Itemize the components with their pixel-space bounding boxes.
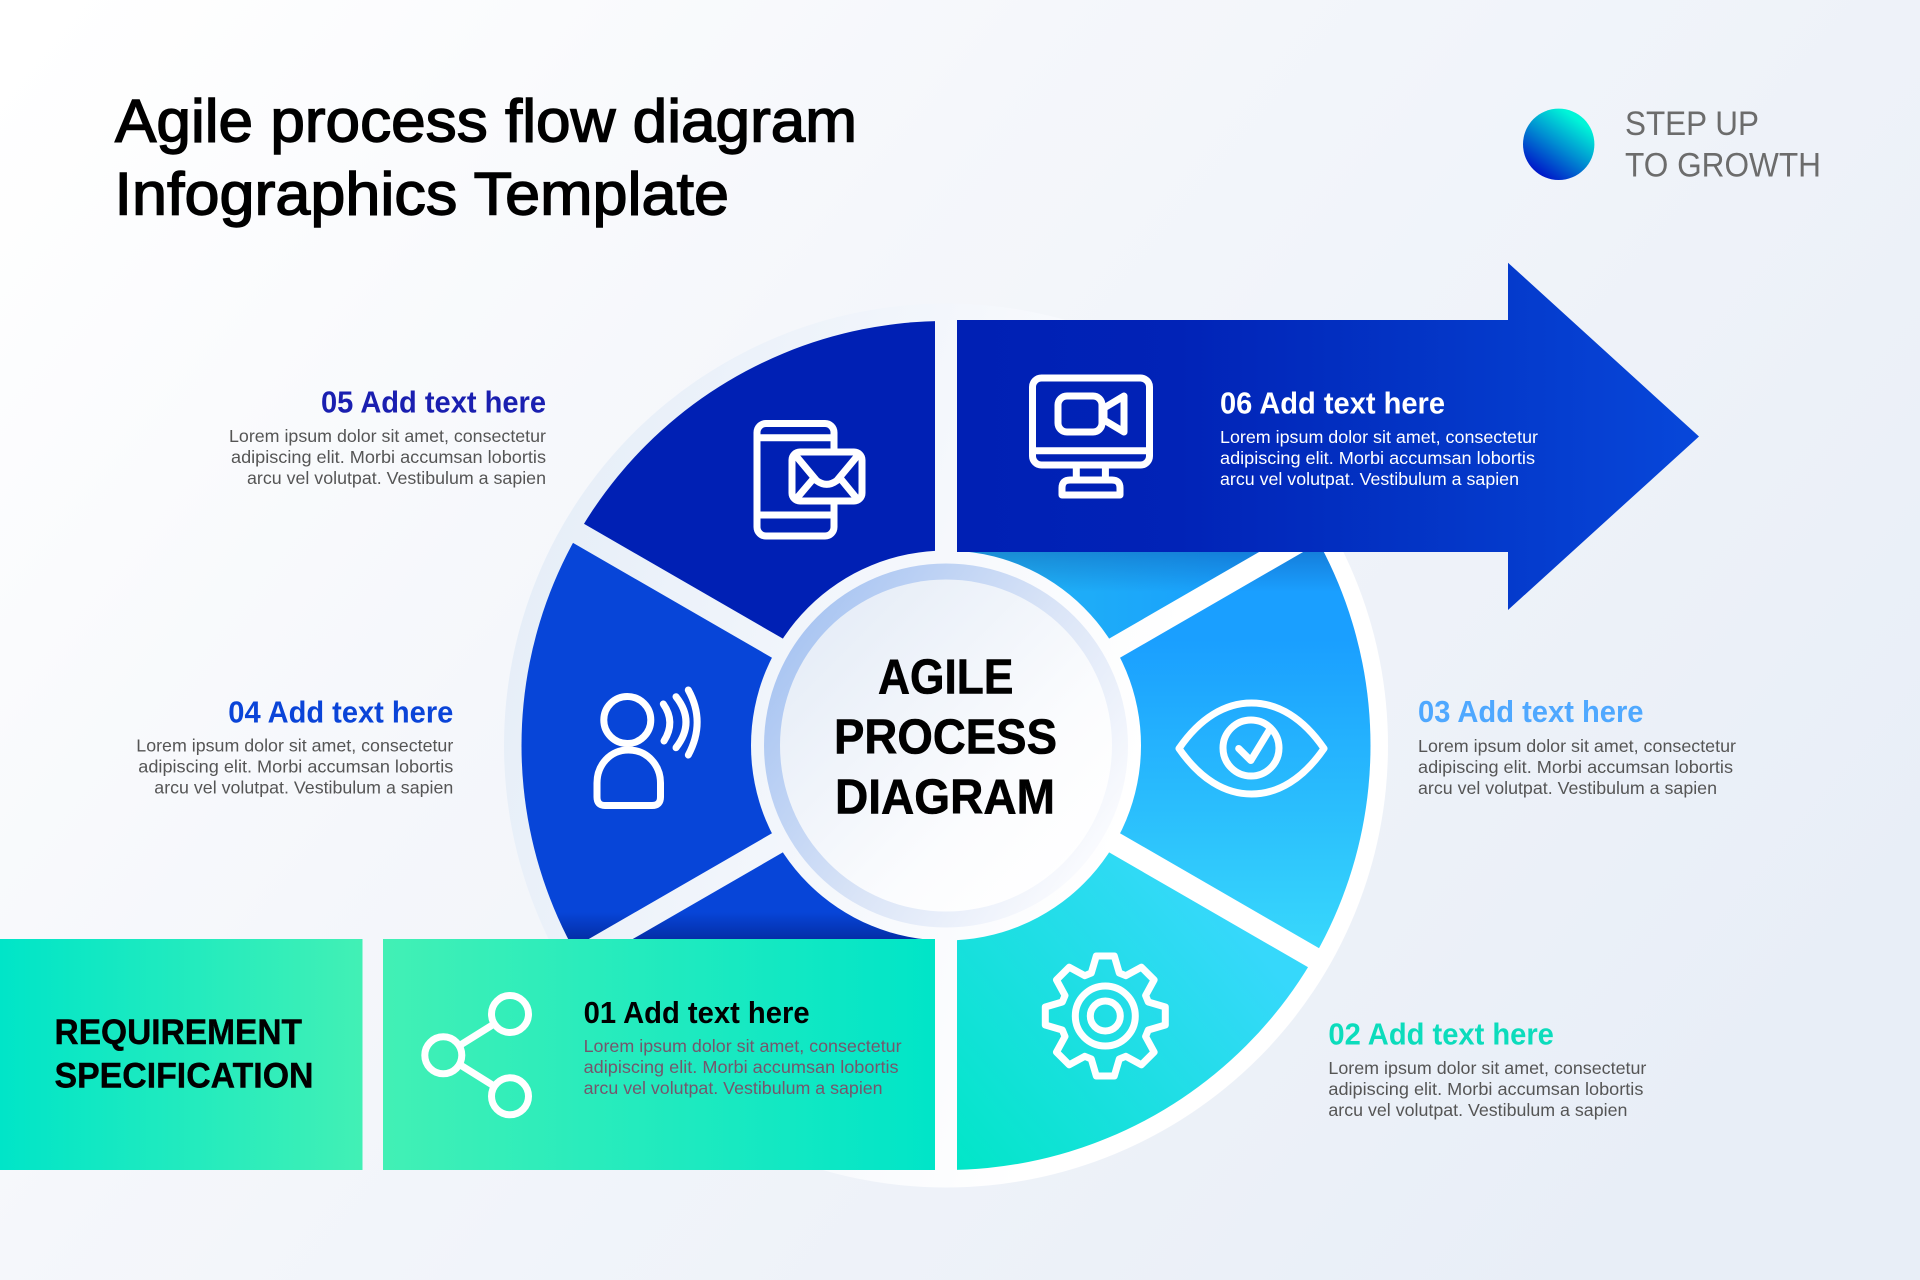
text 04: adipiscing elit. Morbi accumsan lobortis <box>138 757 454 777</box>
logo ball <box>1523 109 1594 180</box>
icon: video monitor <box>1032 378 1150 495</box>
centre text: PROCESS <box>834 710 1057 764</box>
centre text: DIAGRAM <box>835 770 1055 824</box>
requirement text <box>54 1013 314 1096</box>
text 04: Lorem ipsum dolor sit amet, consectetur <box>136 736 453 756</box>
wheel halo <box>504 304 1388 1188</box>
icon: gear <box>1045 956 1165 1076</box>
text 03: 03 Add text here <box>1418 694 1644 729</box>
text 05 <box>229 385 546 488</box>
text 02 <box>1328 1017 1647 1120</box>
text 02: adipiscing elit. Morbi accumsan lobortis <box>1328 1079 1644 1099</box>
text 03: adipiscing elit. Morbi accumsan lobortis <box>1418 757 1733 777</box>
title <box>114 88 857 227</box>
text 05: adipiscing elit. Morbi accumsan lobortis <box>231 447 546 467</box>
logo text <box>1625 105 1821 185</box>
logo text: TO GROWTH <box>1625 147 1821 185</box>
segment 05 <box>584 321 935 639</box>
segment 04 <box>522 542 772 939</box>
icon: phone with envelope <box>757 424 862 536</box>
icon: eye with check <box>1179 703 1324 794</box>
segment 03 <box>1120 552 1370 948</box>
title: Agile process flow diagram <box>115 88 857 155</box>
title: Infographics Template <box>114 160 729 227</box>
text 06: adipiscing elit. Morbi accumsan lobortis <box>1220 448 1535 468</box>
text 01: 01 Add text here <box>584 995 810 1030</box>
text 03: Lorem ipsum dolor sit amet, consectetur <box>1418 736 1736 756</box>
segment 06 <box>970 552 1259 639</box>
icon: person with sound waves <box>597 690 697 806</box>
centre disc <box>764 564 1128 928</box>
text 04: arcu vel volutpat. Vestibulum a sapien <box>154 778 453 798</box>
green bar <box>383 939 935 1170</box>
panel: requirement specification <box>0 939 362 1170</box>
shadow above green bar <box>558 916 922 939</box>
panel 01 <box>383 939 935 1170</box>
segment 02 <box>957 852 1308 1170</box>
text 04: 04 Add text here <box>228 695 453 730</box>
requirement text: SPECIFICATION <box>54 1057 314 1096</box>
text 05: 05 Add text here <box>321 385 546 420</box>
centre ring <box>764 564 1128 928</box>
text 01: arcu vel volutpat. Vestibulum a sapien <box>584 1078 883 1098</box>
centre text <box>834 650 1057 824</box>
text 03 <box>1418 694 1736 798</box>
icon: share <box>425 996 528 1115</box>
requirement text: REQUIREMENT <box>54 1013 302 1052</box>
shadow under arrow <box>970 552 1338 584</box>
text 01: Lorem ipsum dolor sit amet, consectetur <box>584 1036 902 1056</box>
text 03: arcu vel volutpat. Vestibulum a sapien <box>1418 778 1717 798</box>
text 06 <box>1220 385 1538 489</box>
centre text: AGILE <box>878 650 1013 704</box>
text 01: adipiscing elit. Morbi accumsan lobortis <box>584 1057 899 1077</box>
segment 01 <box>633 852 922 939</box>
arrow shape <box>957 263 1699 610</box>
wheel segments <box>522 321 1370 1170</box>
text 02: Lorem ipsum dolor sit amet, consectetur <box>1328 1058 1647 1078</box>
text 04 <box>136 695 454 798</box>
arrow panel 06 <box>957 263 1699 610</box>
text 06: 06 Add text here <box>1220 385 1445 420</box>
green box <box>0 939 362 1170</box>
text 06: arcu vel volutpat. Vestibulum a sapien <box>1220 469 1519 489</box>
logo text: STEP UP <box>1625 105 1759 143</box>
text 02: 02 Add text here <box>1328 1017 1554 1052</box>
centre face <box>780 580 1112 912</box>
text 01 <box>584 995 902 1098</box>
text 05: Lorem ipsum dolor sit amet, consectetur <box>229 426 546 446</box>
text 06: Lorem ipsum dolor sit amet, consectetur <box>1220 427 1538 447</box>
logo: step up to growth <box>1523 105 1821 185</box>
text 05: arcu vel volutpat. Vestibulum a sapien <box>247 468 546 488</box>
text 02: arcu vel volutpat. Vestibulum a sapien <box>1328 1100 1627 1120</box>
